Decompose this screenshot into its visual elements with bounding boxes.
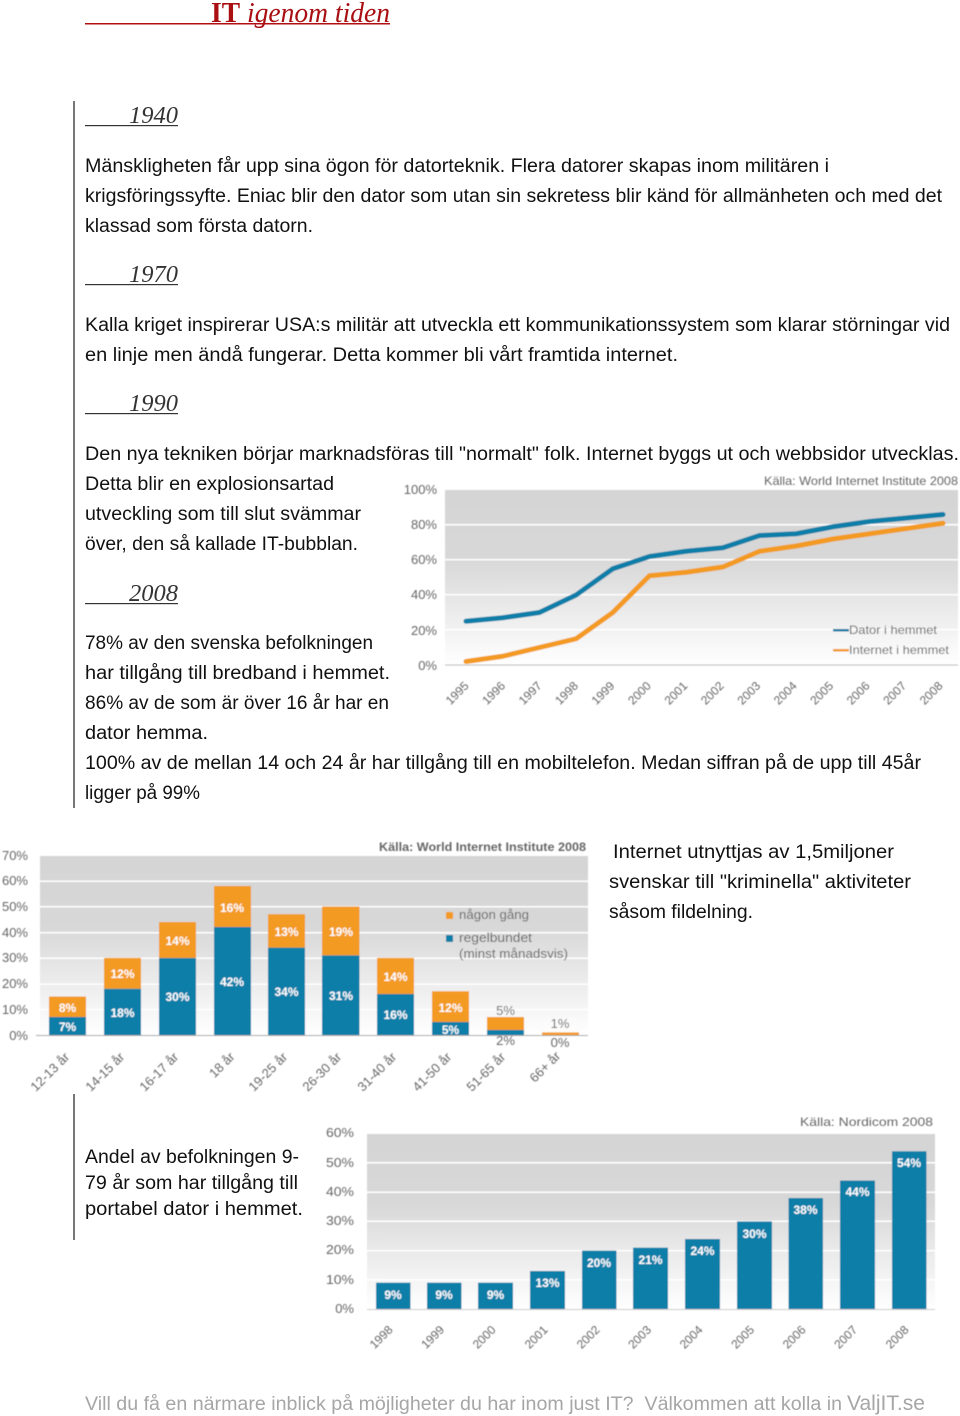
text block: 1970: Kalla kriget inspirerar USA:s militär att utveckla ett kommunikationssystem som klarar störningar vid (85, 315, 950, 336)
legend: Dator i hemmet (849, 623, 938, 637)
x axis labels: 2008 (883, 1323, 912, 1352)
text block: 2008: 100% av de mellan 14 och 24 år har tillgång till en mobiltelefon. Medan siffran på de upp till 45år (85, 753, 922, 774)
bar value labels: 12% (438, 1001, 463, 1015)
stacked bar chart: fildelning per ålder (2, 840, 588, 1094)
legend: (minst månadsvis) (459, 946, 568, 961)
x axis labels: 1999 (418, 1323, 447, 1352)
x axis labels: 2007 (880, 679, 909, 708)
bar value labels: 13% (274, 925, 299, 939)
x axis labels: 2002 (698, 679, 727, 708)
text block: 1970: en linje men ändå fungerar. Detta kommer bli vårt framtida internet. (85, 345, 678, 366)
y axis labels: 0% (9, 1028, 28, 1043)
x axis labels: 2005 (807, 679, 836, 708)
legend: regelbundet (459, 930, 532, 945)
bar value labels: 9% (487, 1288, 505, 1302)
heading: 1990: 1990 (129, 391, 178, 417)
stacked bar chart: fildelning per ålder: 5% (496, 1003, 515, 1018)
x axis labels: 2002 (574, 1323, 603, 1352)
y axis labels: 0% (335, 1301, 354, 1316)
bar value labels: 54% (897, 1156, 921, 1170)
source note: Källa: World Internet Institute 2008 (764, 474, 958, 488)
y axis labels: 10% (2, 1002, 28, 1017)
x axis labels: 16-17 år (136, 1049, 182, 1094)
bar value labels (384, 1156, 921, 1302)
x axis labels: 18 år (206, 1049, 238, 1081)
y axis labels: 10% (326, 1272, 354, 1287)
bar value labels: 20% (587, 1256, 611, 1270)
y axis labels: 30% (326, 1213, 354, 1228)
y axis labels (404, 482, 437, 673)
stacked bar chart: fildelning per ålder: 0% (551, 1035, 570, 1050)
bars: någon gång (49, 886, 579, 1035)
x axis labels: 2004 (677, 1323, 706, 1352)
y axis labels: 60% (326, 1125, 354, 1140)
x axis labels: 2000 (470, 1323, 499, 1352)
x axis labels: 41-50 år (409, 1049, 455, 1094)
x axis labels: 2001 (522, 1323, 551, 1352)
x axis labels: 26-30 år (299, 1049, 345, 1094)
y axis labels: 20% (411, 623, 437, 638)
x axis labels: 2006 (780, 1323, 809, 1352)
bars (376, 1151, 926, 1309)
stacked bar chart: fildelning per ålder: 1% (551, 1016, 570, 1031)
line chart: dator och internet i hemmet (404, 474, 958, 708)
x axis labels: 19-25 år (245, 1049, 291, 1094)
x axis labels: 2004 (771, 679, 800, 708)
heading: 1940 (85, 103, 178, 129)
legend: Internet i hemmet (849, 643, 950, 657)
x axis labels: 2001 (662, 679, 691, 708)
bar value labels: 16% (383, 1008, 408, 1022)
text block: kriminella aktiviteter: såsom fildelning. (609, 902, 753, 923)
x axis labels: 66+ år (526, 1048, 564, 1085)
y axis labels: 20% (326, 1242, 354, 1257)
x axis labels: 2006 (844, 679, 873, 708)
bar value labels: 31% (329, 989, 353, 1003)
footer call to action: ValjIT.se (847, 1392, 925, 1415)
text block: kriminella aktiviteter: svenskar till "kriminella" aktiviteter (609, 872, 912, 893)
footer call to action: Vill du få en närmare inblick på möjligheter du har inom just IT? Välkommen att kolla in (85, 1394, 842, 1415)
text block: 2008: har tillgång till bredband i hemmet. (85, 663, 390, 684)
line: dator i hemmet (466, 514, 943, 621)
y axis labels: 40% (326, 1184, 354, 1199)
text block: 1990 (85, 444, 959, 555)
bar value labels (59, 901, 463, 1037)
heading: 1940: 1940 (129, 103, 178, 129)
y axis labels: 70% (2, 848, 28, 863)
side rule: timeline (73, 101, 75, 808)
x axis labels: 1996 (479, 679, 508, 708)
heading: 2008 (85, 581, 178, 607)
bar value labels: 24% (690, 1244, 715, 1258)
x axis labels: 2003 (734, 679, 763, 708)
x axis labels: 12-13 år (27, 1049, 73, 1094)
x axis labels: 1995 (443, 679, 472, 708)
bar value labels: 30% (742, 1227, 767, 1241)
y axis labels (326, 1125, 354, 1316)
y axis labels: 30% (2, 950, 28, 965)
text block: 1970 (85, 315, 950, 366)
bar value labels: 9% (384, 1288, 402, 1302)
x axis labels: 1998 (367, 1323, 396, 1352)
bar value labels: 14% (383, 970, 408, 984)
x axis labels: 1997 (516, 679, 545, 708)
legend (833, 623, 950, 657)
bar value labels: 18% (110, 1006, 135, 1020)
legend: någon gång (459, 907, 529, 922)
text block: portabel dator (85, 1147, 303, 1220)
text block: 1990: utveckling som till slut svämmar (85, 504, 362, 525)
x axis labels: 2000 (625, 679, 654, 708)
bar value labels: 44% (845, 1185, 870, 1199)
x axis labels: 1998 (552, 679, 581, 708)
bar value labels: 38% (793, 1203, 818, 1217)
y axis labels (2, 848, 28, 1043)
bar value labels: 13% (535, 1276, 560, 1290)
bar chart: portabel dator per år (326, 1115, 935, 1352)
bar value labels: 9% (435, 1288, 453, 1302)
x axis labels (27, 1048, 564, 1094)
y axis labels: 60% (2, 873, 28, 888)
text block: 2008: 86% av de som är över 16 år har en (85, 693, 389, 714)
text block: 1940: klassad som första datorn. (85, 216, 313, 237)
x axis labels (367, 1323, 912, 1352)
text block: 2008: ligger på 99% (85, 783, 200, 804)
y axis labels: 20% (2, 976, 28, 991)
source note: Källa: World Internet Institute 2008 (379, 840, 586, 854)
text block: 2008: dator hemma. (85, 723, 208, 744)
text block: 1940: Mänskligheten får upp sina ögon för datorteknik. Flera datorer skapas inom militären i (85, 156, 829, 177)
bar value labels: 34% (274, 985, 299, 999)
text block: portabel dator: 79 år som har tillgång till (85, 1173, 298, 1194)
heading: 1970: 1970 (129, 262, 178, 288)
y axis labels: 100% (404, 482, 437, 497)
bar value labels: 30% (165, 990, 190, 1004)
y axis labels: 60% (411, 552, 437, 567)
x axis labels: 1999 (589, 679, 618, 708)
y axis labels: 40% (411, 587, 437, 602)
x axis labels: 2007 (831, 1323, 860, 1352)
x axis labels: 14-15 år (82, 1049, 128, 1094)
x axis labels: 2008 (917, 679, 946, 708)
heading: 1990 (85, 391, 178, 417)
y axis labels: 50% (2, 899, 28, 914)
heading: 1970 (85, 262, 178, 288)
bar value labels: 7% (59, 1020, 77, 1034)
x axis labels: 2005 (728, 1323, 757, 1352)
x axis labels: 2003 (625, 1323, 654, 1352)
y axis labels: 0% (418, 658, 437, 673)
text block: 2008: 78% av den svenska befolkningen (85, 633, 373, 654)
text block: 1990: Detta blir en explosionsartad (85, 474, 334, 495)
line: internet i hemmet (466, 523, 943, 662)
bar value labels: 19% (329, 925, 353, 939)
side rule: portabel dator (73, 1094, 75, 1240)
text block: 1990: Den nya tekniken börjar marknadsföras till "normalt" folk. Internet byggs ut och webbsidor utvecklas. (85, 444, 959, 465)
text block: 1940 (85, 156, 943, 237)
bars: regelbundet (49, 927, 524, 1035)
bar value labels: 42% (220, 975, 244, 989)
stacked bar chart: fildelning per ålder: 2% (496, 1033, 515, 1048)
heading: 2008: 2008 (129, 581, 178, 607)
bar value labels: 12% (110, 967, 135, 981)
bar value labels: 5% (442, 1023, 460, 1037)
text block: portabel dator: portabel dator i hemmet. (85, 1199, 303, 1220)
bar value labels: 8% (59, 1001, 77, 1015)
text block: 1990: över, den så kallade IT-bubblan. (85, 534, 358, 555)
text block: 1940: krigsföringssyfte. Eniac blir den dator som utan sin sekretess blir känd för allmänheten och med det (85, 186, 943, 207)
x axis labels: 51-65 år (463, 1049, 509, 1094)
y axis labels: 40% (2, 925, 28, 940)
text block: kriminella aktiviteter: Internet utnyttjas av 1,5miljoner (613, 842, 895, 863)
bar value labels: 14% (165, 934, 190, 948)
x axis labels: 31-40 år (354, 1049, 400, 1094)
x axis labels (443, 679, 946, 708)
y axis labels: 50% (326, 1155, 354, 1170)
legend (446, 907, 568, 961)
y axis labels: 80% (411, 517, 437, 532)
text block: 2008 (85, 633, 922, 804)
bar value labels: 21% (638, 1253, 663, 1267)
bar value labels: 16% (220, 901, 244, 915)
text block: kriminella aktiviteter (609, 842, 912, 923)
text block: portabel dator: Andel av befolkningen 9- (85, 1147, 299, 1168)
source note: Källa: Nordicom 2008 (800, 1115, 933, 1129)
